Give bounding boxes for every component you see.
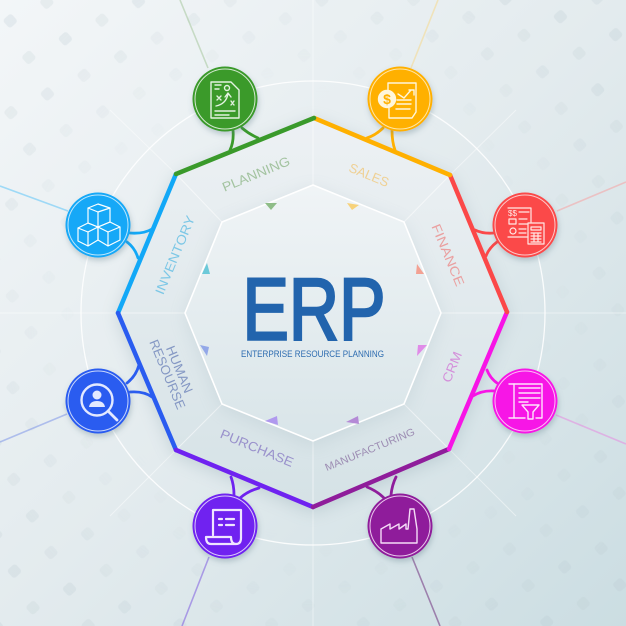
segment: finance	[450, 175, 507, 312]
icon: crm	[492, 368, 558, 434]
segment: sales	[314, 118, 450, 175]
segment: planning	[176, 118, 314, 174]
panel dividers	[118, 118, 507, 507]
icon: sales	[368, 66, 432, 132]
segment labels	[146, 153, 468, 474]
icon: manufacturing	[368, 494, 432, 558]
title: ERP: ERP	[242, 260, 386, 358]
segment: human resourse	[118, 313, 176, 450]
label: finance: FINANCE	[428, 222, 468, 289]
icon: finance	[492, 192, 558, 258]
icon: planning	[192, 66, 258, 132]
icon: inventory	[66, 192, 130, 258]
inner octagon shadow	[185, 189, 441, 445]
label: planning: PLANNING	[220, 153, 292, 195]
inner octagon	[185, 185, 441, 441]
icon: human resourse	[66, 368, 130, 434]
dollar signs: $$	[508, 209, 517, 218]
segment: crm	[449, 312, 507, 449]
segment: inventory	[118, 174, 176, 313]
segment: manufacturing	[313, 449, 449, 507]
label: crm: CRM	[439, 349, 465, 385]
label: purchase: PURCHASE	[218, 426, 296, 470]
label: manufacturing: MANUFACTURING	[323, 426, 417, 474]
label: human resourse: HUMAN	[163, 343, 196, 395]
label: inventory: INVENTORY	[152, 213, 198, 297]
subtitle: ENTERPRISE RESOURCE PLANNING	[241, 349, 384, 360]
outer octagon panel	[118, 118, 507, 507]
dollar sign: $	[383, 91, 391, 107]
segment: purchase	[176, 450, 313, 507]
coloured octagon segments with connectors	[118, 118, 507, 507]
label: sales: SALES	[347, 160, 392, 190]
label: human resourse: RESOURSE	[146, 337, 189, 412]
small triangle markers	[200, 203, 427, 425]
center title	[241, 260, 386, 360]
octagon shadow	[118, 122, 507, 511]
icon: purchase	[192, 494, 258, 558]
